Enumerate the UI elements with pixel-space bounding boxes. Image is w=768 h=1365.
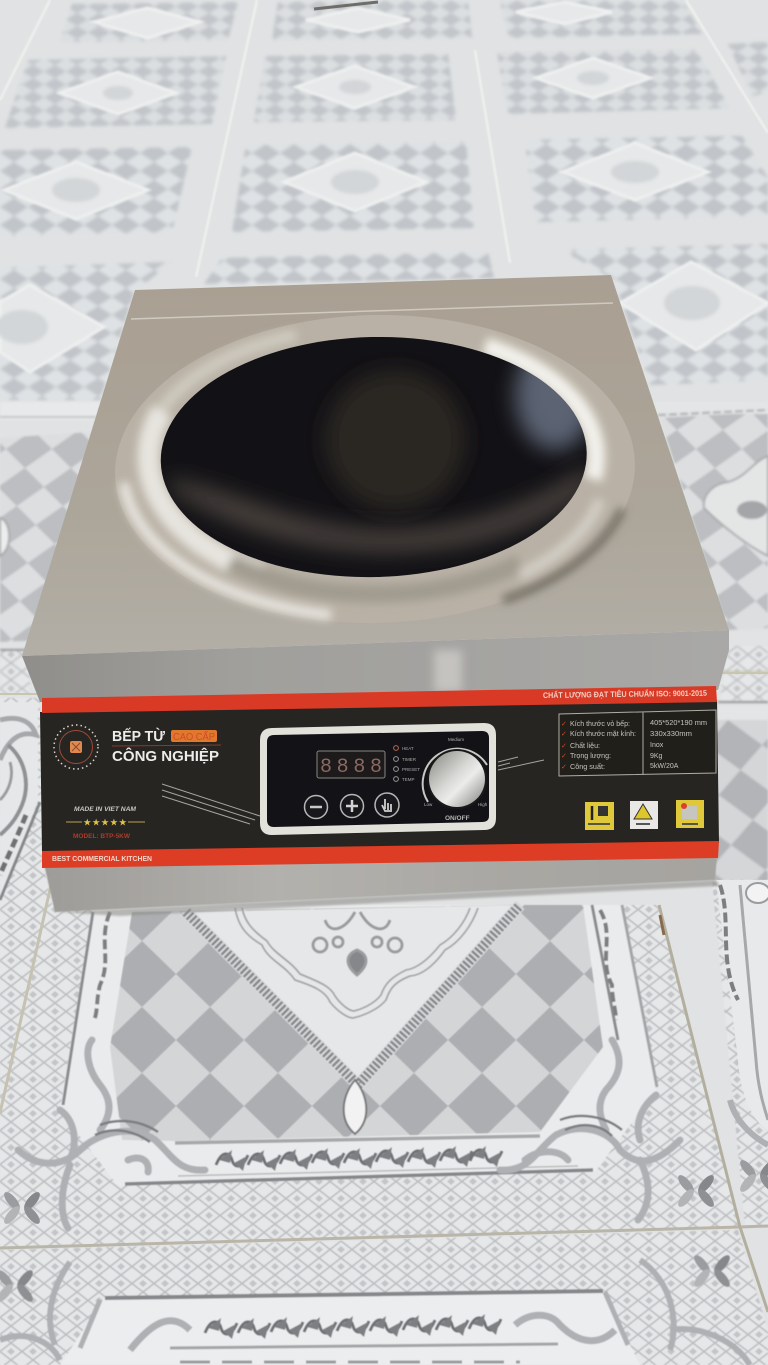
right flower [675, 1173, 717, 1209]
warning icon: plug [585, 802, 614, 830]
checker field [110, 905, 603, 1141]
brand heading: BẾP TỪ [112, 727, 166, 745]
side ornament columns [94, 910, 616, 1020]
frame interior [60, 905, 656, 1186]
brand heading: CÔNG NGHIỆP [112, 747, 219, 765]
power knob [423, 737, 488, 822]
wok recess [112, 309, 638, 629]
induction cooker [22, 275, 729, 912]
cooker top surface [22, 275, 729, 656]
status indicators [394, 746, 420, 782]
glass lower band reflection [170, 465, 590, 552]
dark scroll accents [95, 1116, 622, 1142]
specification table [559, 710, 716, 776]
frame lines [63, 905, 657, 1184]
wok black glass [160, 337, 587, 578]
pale medallion V [181, 905, 524, 1077]
power knob: ON/OFF [445, 815, 470, 822]
status indicators: TEMP [402, 777, 415, 782]
spec check marks: ✓ [561, 721, 567, 728]
medallion motif [313, 912, 402, 975]
spec labels: Công suất: [570, 762, 605, 771]
premium badge: CAO CẤP [173, 730, 215, 743]
spec values: 5kW/20A [650, 763, 679, 770]
spec values: 330x330mm [650, 731, 692, 738]
touch button [375, 793, 399, 817]
floor grout lines [0, 0, 768, 277]
red top band [42, 686, 717, 713]
lower row tile [0, 1230, 768, 1365]
warning icon: hazard [630, 801, 658, 829]
control label panel [40, 686, 719, 868]
status indicators: TIMER [402, 757, 417, 762]
rim highlights [124, 335, 622, 615]
cooker shadow [55, 880, 720, 916]
quality text: CHẤT LƯỢNG ĐẠT TIÊU CHUẨN ISO: 9001-2015 [543, 688, 708, 700]
spec values: Inox [650, 742, 664, 749]
mid side floor: right checker and medallion [650, 402, 768, 882]
bottom slogan: BEST COMMERCIAL KITCHEN [52, 854, 152, 863]
upper floor tiles [0, 0, 768, 400]
bottom large tile [0, 905, 740, 1248]
power knob: High [478, 802, 488, 807]
spec check marks: ✓ [561, 753, 567, 760]
floor grout verticals and horizontal lower [0, 673, 768, 1312]
mid side floor: left checker [0, 402, 100, 694]
spec values: 405*520*190 mm [650, 720, 707, 727]
strip highlight [434, 650, 462, 692]
heading divider [112, 745, 221, 746]
spec labels: Kích thước mặt kính: [570, 731, 636, 738]
spec check marks [561, 721, 567, 771]
dotted V band [186, 905, 520, 1085]
spec check marks: ✓ [561, 764, 567, 771]
glass right blue reflection [515, 340, 595, 450]
decorative lines [162, 757, 544, 824]
medallion contour [235, 908, 478, 1018]
floor diamonds [0, 2, 768, 372]
spec labels: Kích thước vỏ bếp: [570, 719, 630, 728]
logo [54, 725, 98, 769]
minus button [304, 796, 328, 818]
diamond inner motifs [0, 71, 720, 344]
made in vietnam: MADE IN VIET NAM [74, 806, 136, 813]
star rating [66, 818, 145, 828]
status indicators: HEAT [402, 746, 414, 751]
front edge strip [22, 630, 729, 702]
right side tile [712, 880, 768, 1225]
power knob: Medium [448, 737, 464, 742]
spec check marks: ✓ [561, 731, 567, 738]
spec check marks: ✓ [561, 743, 567, 750]
plus button [340, 794, 364, 818]
spec values: 9Kg [650, 753, 663, 760]
brand heading [112, 727, 219, 765]
star rating: ★★★★★ [83, 818, 127, 828]
red bottom band [42, 841, 719, 868]
control panel [260, 723, 496, 835]
model: MODEL: BTP-5KW [73, 833, 131, 840]
spec labels: Chất liệu: [570, 741, 600, 750]
ornament strip [216, 1146, 502, 1171]
spec labels [570, 719, 636, 771]
dark object top edge [314, 2, 378, 9]
corner scrolls [18, 1040, 680, 1228]
power knob: Low [424, 802, 433, 807]
label black background [40, 700, 719, 852]
cooker lower body [42, 845, 718, 912]
rear lip line [131, 303, 613, 319]
glass warm centre reflection [325, 370, 465, 510]
spec labels: Trọng lượng: [570, 753, 611, 760]
spec values [650, 720, 707, 770]
teardrop [344, 1080, 366, 1134]
left side tile scrolls [0, 698, 52, 1110]
wok outer rim [112, 309, 638, 629]
digital display: 8888 [320, 756, 382, 779]
status indicators: PRESET [402, 767, 420, 772]
warning icon: hot surface [676, 800, 704, 828]
left edge flower [1, 1190, 43, 1226]
